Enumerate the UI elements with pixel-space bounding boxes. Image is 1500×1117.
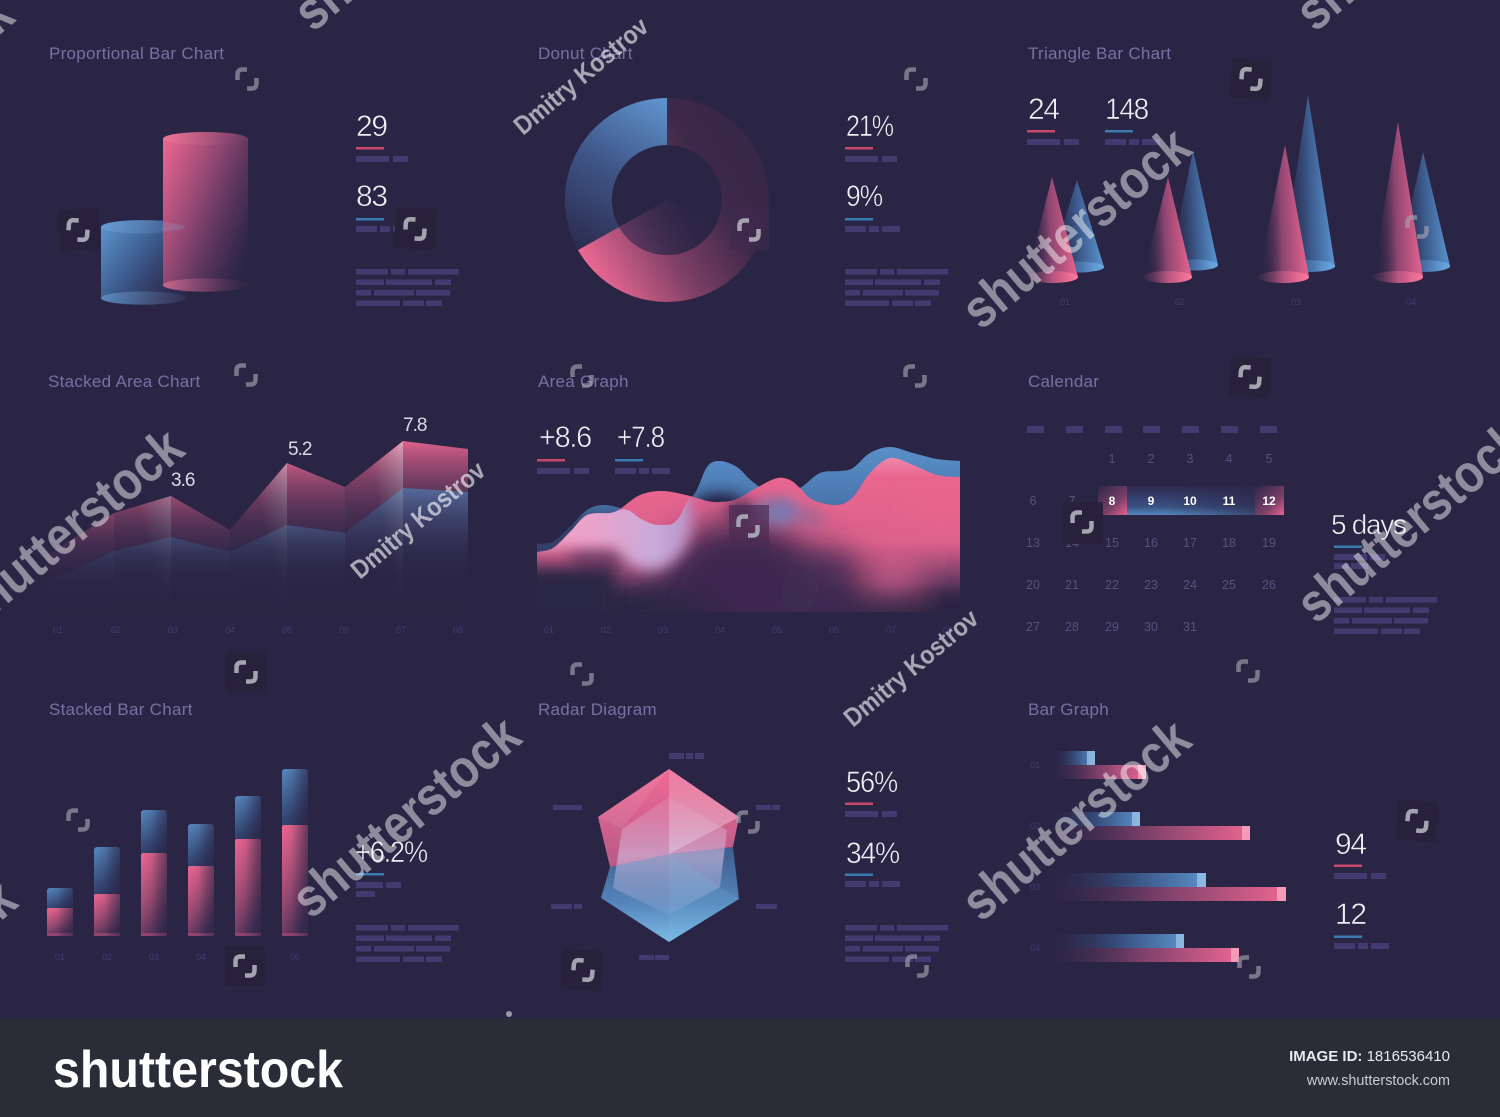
calendar dates: 26 bbox=[1262, 578, 1276, 592]
stat: 9% bbox=[845, 180, 900, 232]
heading: Area Graph bbox=[538, 372, 629, 391]
stat: +8.6: +8.6 bbox=[539, 421, 592, 454]
calendar dates: 31 bbox=[1183, 620, 1197, 634]
calendar dates: 23 bbox=[1144, 578, 1158, 592]
calendar dates: 18 bbox=[1222, 536, 1236, 550]
panel: area graph bbox=[537, 375, 960, 633]
selected dates: 10 bbox=[1183, 494, 1197, 508]
watermark: shutterstock: shutterstock bbox=[950, 115, 1202, 340]
value labels: 5.2 bbox=[288, 439, 312, 460]
axis labels: 08 bbox=[453, 625, 463, 635]
axis labels: 06 bbox=[829, 625, 839, 635]
value labels: 7.8 bbox=[403, 415, 427, 436]
chart: horizontal bars bbox=[1056, 751, 1286, 962]
calendar dates bbox=[1026, 452, 1276, 634]
stat: 5 days bbox=[1331, 509, 1406, 569]
heading: Stacked Bar Chart bbox=[49, 700, 193, 719]
stat: 12 bbox=[1334, 898, 1389, 949]
chart: stacked area bbox=[49, 441, 468, 574]
calendar dates: 25 bbox=[1222, 578, 1236, 592]
calendar dates: 7 bbox=[1069, 494, 1076, 508]
axis labels: 01 bbox=[1060, 297, 1070, 307]
selected date range bbox=[1098, 486, 1284, 515]
watermark: shutterstock: shutterstock bbox=[950, 707, 1202, 932]
stat: +7.8: +7.8 bbox=[617, 421, 665, 454]
value labels: 3.6 bbox=[171, 470, 195, 491]
stat: 148 bbox=[1105, 93, 1160, 145]
footer url: www.shutterstock.com bbox=[1306, 1073, 1450, 1089]
calendar dates: 22 bbox=[1105, 578, 1119, 592]
axis labels: 01 bbox=[1030, 760, 1040, 770]
stat: 34% bbox=[845, 837, 900, 887]
panel: stacked bar chart bbox=[47, 700, 459, 962]
stat: +6.2% bbox=[355, 836, 428, 897]
axis labels: 03 bbox=[658, 625, 668, 635]
axis labels: 04 bbox=[225, 625, 235, 635]
calendar dates: 16 bbox=[1144, 536, 1158, 550]
heading: Triangle Bar Chart bbox=[1028, 44, 1171, 63]
heading: Proportional Bar Chart bbox=[49, 44, 224, 63]
selected dates: 8 bbox=[1109, 494, 1116, 508]
stat: 94: 94 bbox=[1335, 828, 1366, 861]
axis labels: 02 bbox=[111, 625, 121, 635]
footer image id: IMAGE ID: 1816536410 bbox=[1289, 1048, 1450, 1065]
chart: stacked bars bbox=[47, 769, 308, 936]
axis labels bbox=[1060, 297, 1416, 307]
axis labels: 01 bbox=[53, 625, 63, 635]
calendar dates: 1 bbox=[1109, 452, 1116, 466]
calendar dates: 21 bbox=[1065, 578, 1079, 592]
axis labels: 03 bbox=[1030, 882, 1040, 892]
axis labels bbox=[53, 625, 463, 635]
panel: triangle bar chart bbox=[1027, 44, 1450, 307]
stat: 5 days: 5 days bbox=[1331, 509, 1406, 540]
watermark: Dmitry Kostrov: Dmitry Kostrov bbox=[345, 455, 491, 585]
panel: calendar bbox=[1026, 372, 1437, 634]
stat: 29 bbox=[356, 110, 408, 162]
panel: donut chart bbox=[538, 44, 948, 306]
axis labels: 02 bbox=[601, 625, 611, 635]
stat: 24: 24 bbox=[1028, 93, 1059, 126]
axis labels: 02 bbox=[1030, 821, 1040, 831]
text block bbox=[1334, 597, 1437, 634]
calendar dates: 14 bbox=[1065, 536, 1079, 550]
stat: +6.2%: +6.2% bbox=[355, 836, 428, 869]
stat: 21%: 21% bbox=[846, 110, 894, 143]
calendar dates: 15 bbox=[1105, 536, 1119, 550]
axis labels bbox=[544, 625, 953, 635]
heading: Stacked Area Chart bbox=[48, 372, 200, 391]
axis labels: 02 bbox=[1175, 297, 1185, 307]
axis labels: 06 bbox=[290, 952, 300, 962]
heading: Calendar bbox=[1028, 372, 1099, 391]
axis labels bbox=[55, 952, 300, 962]
axis labels: 03 bbox=[149, 952, 159, 962]
selected dates: 11 bbox=[1223, 494, 1236, 508]
stat: 83: 83 bbox=[356, 180, 387, 213]
text block bbox=[356, 925, 459, 962]
watermark: Dmitry Kostrov: Dmitry Kostrov bbox=[508, 11, 654, 141]
axis labels: 04 bbox=[1406, 297, 1416, 307]
calendar dates: 5 bbox=[1266, 452, 1273, 466]
axis labels: 03 bbox=[168, 625, 178, 635]
selected dates bbox=[1109, 494, 1276, 508]
stat: +8.6 bbox=[537, 421, 592, 474]
axis labels: 04 bbox=[196, 952, 206, 962]
stat: +7.8 bbox=[615, 421, 670, 474]
calendar dates: 30 bbox=[1144, 620, 1158, 634]
calendar dates: 2 bbox=[1148, 452, 1155, 466]
calendar dates: 29 bbox=[1105, 620, 1119, 634]
stat: 24 bbox=[1027, 93, 1079, 145]
chart: area bbox=[537, 447, 960, 612]
calendar dates: 27 bbox=[1026, 620, 1040, 634]
panel: stacked area chart bbox=[47, 372, 468, 635]
heading: Bar Graph bbox=[1028, 700, 1109, 719]
axis labels: 06 bbox=[339, 625, 349, 635]
text block bbox=[356, 269, 459, 306]
calendar dates: 13 bbox=[1026, 536, 1040, 550]
watermark: shutterstock: shutterstock bbox=[280, 704, 532, 929]
value labels bbox=[171, 415, 427, 491]
axis labels: 07 bbox=[396, 625, 406, 635]
heading: Donut Chart bbox=[538, 44, 633, 63]
text block bbox=[845, 269, 948, 306]
axis labels: 03 bbox=[1291, 297, 1301, 307]
calendar dates: 20 bbox=[1026, 578, 1040, 592]
stat: 148: 148 bbox=[1105, 93, 1149, 126]
stat: 83 bbox=[356, 180, 411, 232]
calendar dates: 17 bbox=[1183, 536, 1197, 550]
axis labels: 04 bbox=[715, 625, 725, 635]
footer bar bbox=[0, 1018, 1500, 1117]
calendar dates: 28 bbox=[1065, 620, 1079, 634]
watermark: Dmitry Kostrov bbox=[345, 11, 984, 733]
heading: Radar Diagram bbox=[538, 700, 657, 719]
axis labels: 07 bbox=[886, 625, 896, 635]
watermark icons bbox=[58, 58, 1438, 991]
stat: 56%: 56% bbox=[846, 766, 898, 799]
selected dates: 12 bbox=[1262, 494, 1276, 508]
axis labels: 04 bbox=[1030, 943, 1040, 953]
selected dates: 9 bbox=[1148, 494, 1155, 508]
panel: proportional bar chart bbox=[49, 44, 459, 306]
chart: donut bbox=[565, 98, 769, 302]
axis labels: 05 bbox=[243, 952, 253, 962]
stat: 34%: 34% bbox=[846, 837, 900, 870]
stat: 12: 12 bbox=[1335, 898, 1366, 931]
axis labels: 01 bbox=[55, 952, 65, 962]
axis placeholders bbox=[551, 753, 780, 960]
watermark: Dmitry Kostrov: Dmitry Kostrov bbox=[838, 603, 984, 733]
calendar dates: 3 bbox=[1187, 452, 1194, 466]
axis labels: 05 bbox=[772, 625, 782, 635]
stat: 56% bbox=[845, 766, 898, 817]
text block bbox=[845, 925, 948, 962]
calendar dates: 6 bbox=[1030, 494, 1037, 508]
calendar dates: 19 bbox=[1262, 536, 1276, 550]
axis labels: 01 bbox=[544, 625, 554, 635]
stat: 94 bbox=[1334, 828, 1386, 879]
chart: cylinders bbox=[101, 132, 248, 305]
chart: cones bbox=[1027, 95, 1450, 283]
weekday placeholders bbox=[1027, 426, 1277, 433]
axis labels: 08 bbox=[943, 625, 953, 635]
footer logo: shutterstock bbox=[53, 1041, 343, 1099]
panel: radar diagram bbox=[538, 700, 948, 962]
panel: bar graph bbox=[1028, 700, 1389, 962]
axis labels: 05 bbox=[282, 625, 292, 635]
stat: 21% bbox=[845, 110, 897, 162]
calendar dates: 4 bbox=[1226, 452, 1233, 466]
calendar dates: 24 bbox=[1183, 578, 1197, 592]
axis labels bbox=[1030, 760, 1040, 953]
axis labels: 02 bbox=[102, 952, 112, 962]
stat: 29: 29 bbox=[356, 110, 387, 143]
stat: 9%: 9% bbox=[846, 180, 883, 213]
chart: radar bbox=[598, 769, 739, 942]
